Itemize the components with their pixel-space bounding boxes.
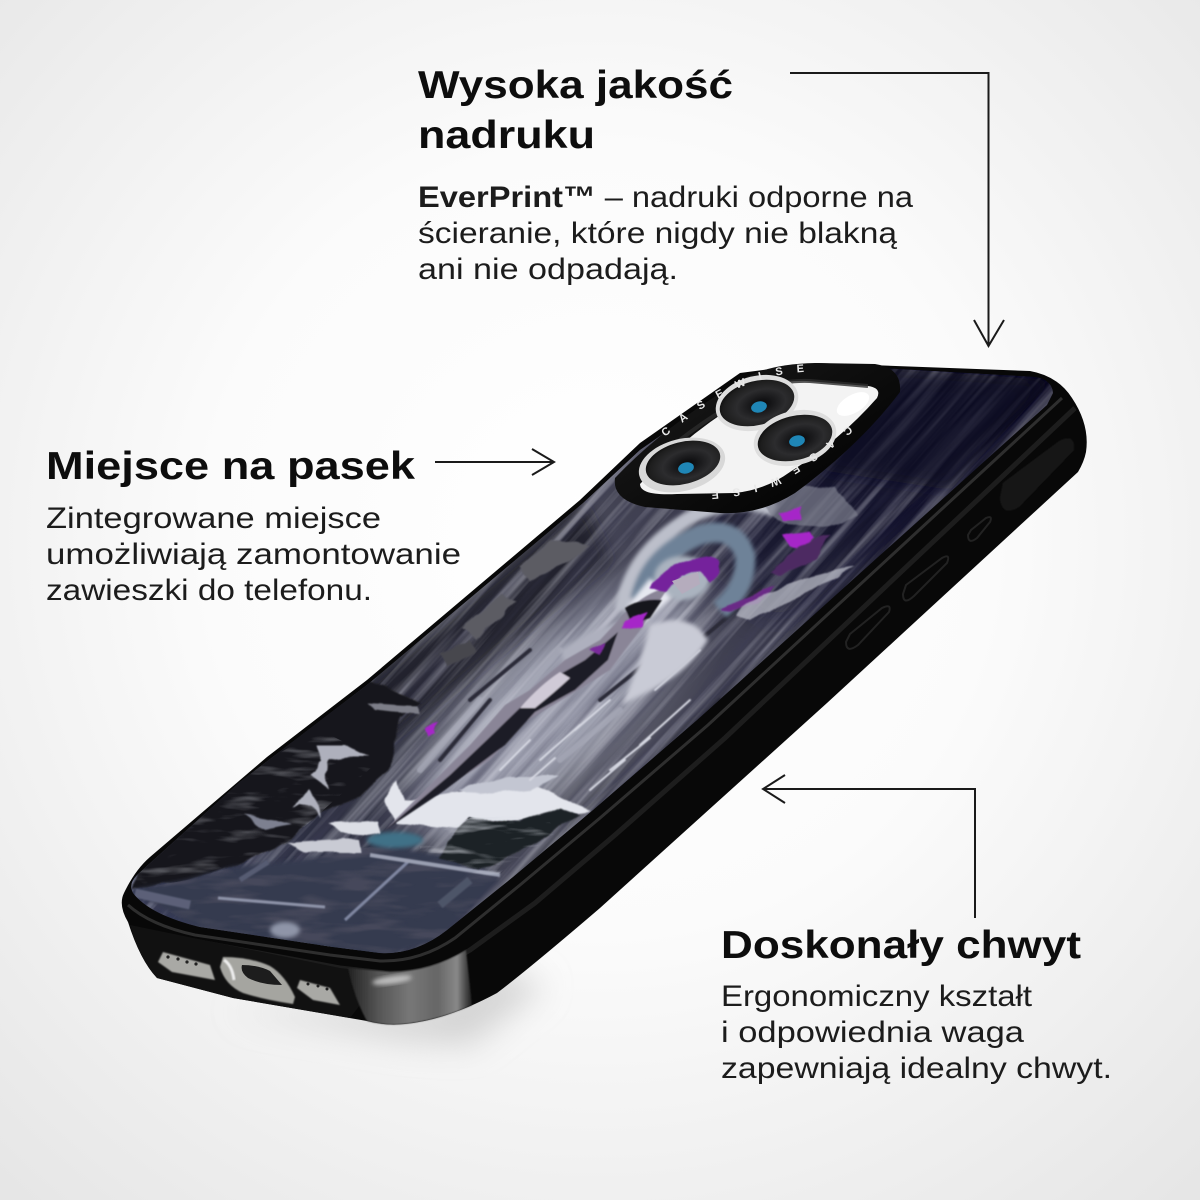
right feather streak [735,566,855,620]
lower face band [130,925,385,1018]
camera plate [640,381,878,494]
text block: zapewniają idealny chwyt. [721,1052,1112,1085]
side wall groove [135,408,1075,973]
face [672,572,700,594]
figure body [385,588,668,830]
text block: i odpowiednia waga [721,1016,1024,1049]
lens: left [633,429,731,501]
speaker right [297,980,340,1005]
text block: Ergonomiczny kształt [721,980,1033,1013]
heading: Miejsce na pasek [46,445,415,488]
heading: Doskonały chwyt [721,924,1081,967]
lens: right [748,402,842,474]
case side wall and bumper [122,363,1087,1025]
swirl halo [622,504,775,610]
ring lettering bottom: CASEWISE [712,427,852,500]
action button on side [1000,438,1074,510]
purple hair [648,557,720,592]
callout: grip [721,924,1112,1085]
text block [46,502,461,607]
left rock mass [133,680,420,890]
streak textures [131,368,1053,952]
lens: top [710,367,804,439]
lower left ground [133,845,500,958]
callout: print quality [418,64,913,286]
wings and mist [560,576,710,706]
painterly streaks [420,590,760,790]
dark band along right edge [562,569,864,834]
arrow: to case top [790,73,1004,346]
text block [418,181,913,286]
heading: nadruku [418,114,595,157]
corner sheen [372,973,412,987]
island ring [615,363,900,513]
rim above the halo [765,485,858,528]
ground streaks [160,847,492,953]
lower left details [135,855,500,920]
plate highlight [833,387,873,421]
glossy lower right corner [348,950,472,1025]
dark band along left edge [371,503,614,742]
arrow: to strap slot [435,449,554,475]
dark debris [440,808,580,870]
heading [418,64,733,157]
stone steps [440,540,590,668]
ring lettering top: CASEWISE [662,364,804,436]
water teal [367,832,423,848]
snow clump [270,922,300,938]
text block: ani nie odpadają. [418,253,678,286]
text block: Zintegrowane miejsce [46,502,381,535]
printed artwork on case back [131,368,1053,954]
arrow: to case side [763,775,975,918]
top right darkening [820,368,1053,490]
speaker left [158,952,215,980]
plate upper shadow [665,381,868,452]
camera island [614,363,900,514]
purple accents [427,508,830,736]
upper dark column band [694,468,916,620]
callout: strap slot [46,445,461,607]
phone case illustration [122,363,1087,1026]
lower snow field [287,775,590,852]
text block: EverPrint™ – nadruki odporne na [418,181,913,214]
volume and side buttons [846,517,991,649]
heading: Wysoka jakość [418,64,733,107]
text block [721,980,1112,1085]
snow on rocks [245,703,420,830]
charging port [220,957,295,1004]
text block: zawieszki do telefonu. [46,574,372,607]
bumper bevel along art [128,398,1062,961]
text block: ścieranie, które nigdy nie blakną [418,217,897,250]
rock flecks [133,730,380,890]
glow behind figure [654,556,710,600]
mist along centre [392,560,718,854]
text block: umożliwiają zamontowanie [46,538,461,571]
phone drop shadow [230,970,545,1045]
debris snow streaks [420,815,553,875]
